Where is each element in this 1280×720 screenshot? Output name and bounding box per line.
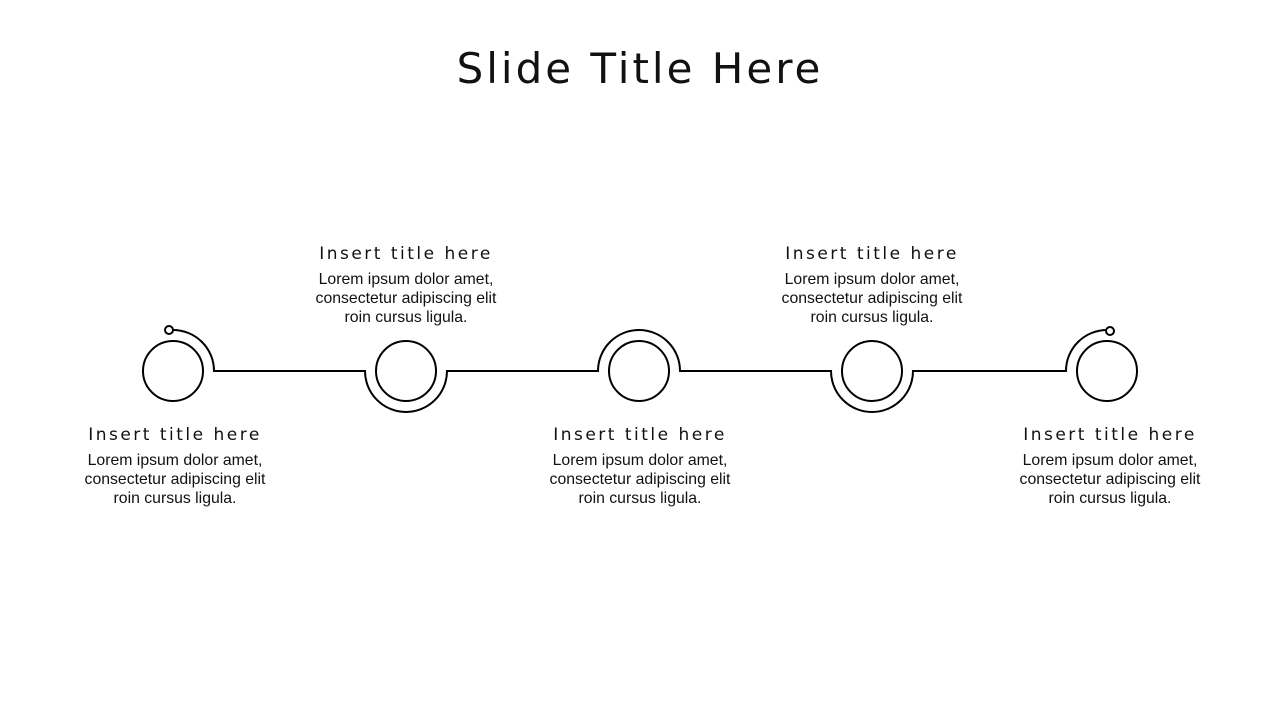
text: step 5 [1020, 425, 1200, 507]
text: step 3: Insert title here [553, 425, 727, 445]
text: step 4: Insert title here [785, 244, 959, 264]
text: step 3: roin cursus ligula. [579, 490, 701, 507]
connector path [173, 330, 1107, 412]
text: step 2 [316, 244, 496, 326]
text: step 5: Insert title here [1023, 425, 1197, 445]
text: step 3: consectetur adipiscing elit [550, 471, 730, 488]
text: step 2: consectetur adipiscing elit [316, 290, 496, 307]
title: Slide Title Here [457, 44, 823, 93]
text: step 2: Insert title here [319, 244, 493, 264]
text: step 1: roin cursus ligula. [114, 490, 236, 507]
text: step 2: Lorem ipsum dolor amet, [319, 271, 493, 288]
text: step 4: roin cursus ligula. [811, 309, 933, 326]
text: step 2: roin cursus ligula. [345, 309, 467, 326]
text: step 4: consectetur adipiscing elit [782, 290, 962, 307]
text: step 1: Lorem ipsum dolor amet, [88, 452, 262, 469]
text: step 1: consectetur adipiscing elit [85, 471, 265, 488]
text: step 1 [85, 425, 266, 507]
text: step 1: Insert title here [88, 425, 262, 445]
text: step 3 [550, 425, 730, 507]
text: step 5: roin cursus ligula. [1049, 490, 1171, 507]
text: step 4 [782, 244, 962, 326]
text: step 5: consectetur adipiscing elit [1020, 471, 1200, 488]
text: step 3: Lorem ipsum dolor amet, [553, 452, 727, 469]
step markers [143, 341, 1137, 401]
text: step 4: Lorem ipsum dolor amet, [785, 271, 959, 288]
end dots [165, 326, 1114, 335]
text: step 5: Lorem ipsum dolor amet, [1023, 452, 1197, 469]
